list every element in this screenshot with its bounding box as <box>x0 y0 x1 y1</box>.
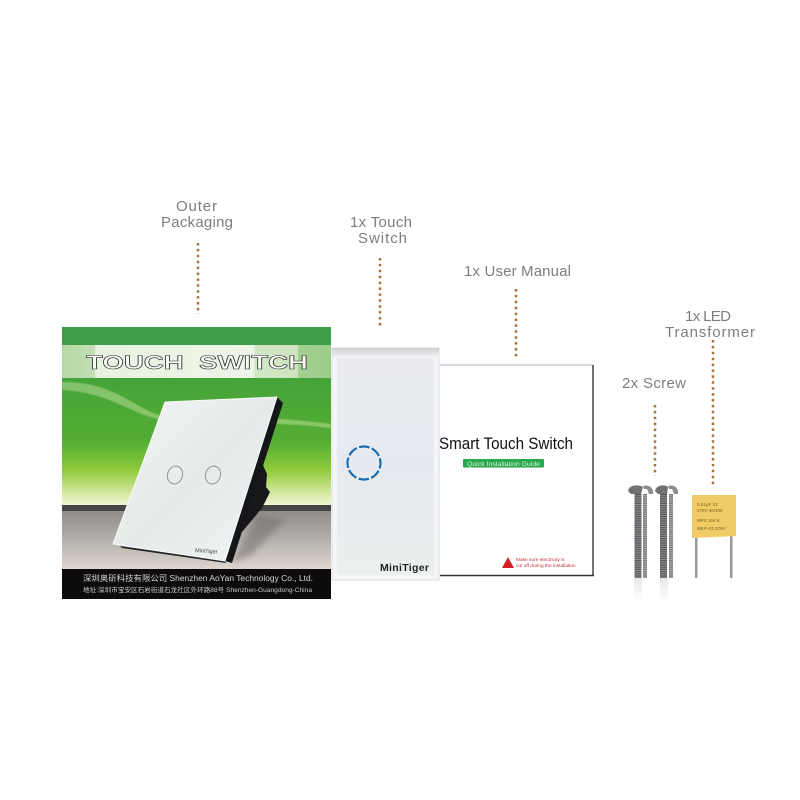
switch back <box>236 462 270 532</box>
dotted line: screw <box>654 405 656 476</box>
label: LED transformer: Transformer <box>665 324 755 341</box>
warning triangle <box>502 557 514 568</box>
warning <box>502 557 576 569</box>
light swoosh <box>62 382 331 428</box>
capacitor markings: MKP-X2 275V <box>697 526 726 531</box>
dotted line: touch switch <box>379 258 381 328</box>
touch ring <box>348 446 380 480</box>
screw shafts <box>638 494 664 578</box>
dotted line: outer packaging <box>197 243 199 314</box>
warning text: Make sure electricity is <box>516 557 565 563</box>
company name: 深圳奥斫科技有限公司 Shenzhen AoYan Technology Co., Ltd. <box>83 573 313 583</box>
capacitor markings: 0.01μF X2 <box>697 502 719 507</box>
label: LED transformer: 1x LED <box>685 308 731 325</box>
box footer <box>62 569 331 599</box>
panel: LED transformer <box>692 495 736 578</box>
panel: screws <box>628 485 678 602</box>
guide badge: Quick Installation Guide <box>467 461 540 468</box>
brand: MiniTiger <box>380 562 429 574</box>
screw fade <box>634 578 642 602</box>
label: user manual: 1x User Manual <box>464 263 571 280</box>
label: touch switch: Switch <box>358 230 407 247</box>
switch touch rings <box>165 464 185 486</box>
dotted line: LED transformer <box>712 340 714 486</box>
top bevel <box>332 348 439 358</box>
label: outer packaging: Outer <box>176 198 217 215</box>
floor <box>62 505 331 511</box>
switch brand: MiniTiger <box>195 548 218 556</box>
panel: user manual <box>439 365 594 576</box>
box top green band <box>62 327 331 345</box>
box title: TOUCH SWITCH <box>86 352 308 374</box>
manual page <box>440 365 593 575</box>
warning text: cut off during the installation <box>516 563 576 569</box>
label: screw: 2x Screw <box>622 375 686 392</box>
label: touch switch: 1x Touch <box>350 214 412 231</box>
glass plate <box>332 348 439 580</box>
title band <box>62 345 331 378</box>
capacitor markings: 275V 40/100 <box>697 508 723 513</box>
capacitor body <box>692 495 736 538</box>
box green background <box>62 378 331 506</box>
company address: 地址:深圳市宝安区石岩街道石龙社区外环路88号 Shenzhen-Guangdong-China <box>83 585 312 594</box>
switch face <box>113 397 277 561</box>
switch shadow <box>232 515 285 562</box>
capacitor legs <box>695 538 698 578</box>
manual title: Smart Touch Switch <box>439 435 573 453</box>
glass inner face <box>337 358 434 575</box>
screw heads <box>628 485 643 494</box>
switch illustration <box>113 397 285 563</box>
panel: touch switch <box>332 348 439 580</box>
dotted line: user manual <box>515 289 517 359</box>
capacitor markings <box>697 502 726 531</box>
label: outer packaging: Packaging <box>161 214 233 231</box>
switch bottom edge shadow <box>120 546 226 563</box>
guide badge <box>463 459 544 468</box>
switch black side <box>225 397 283 563</box>
panel: outer packaging box <box>62 327 331 599</box>
capacitor markings: MPX 104 K <box>697 518 721 523</box>
